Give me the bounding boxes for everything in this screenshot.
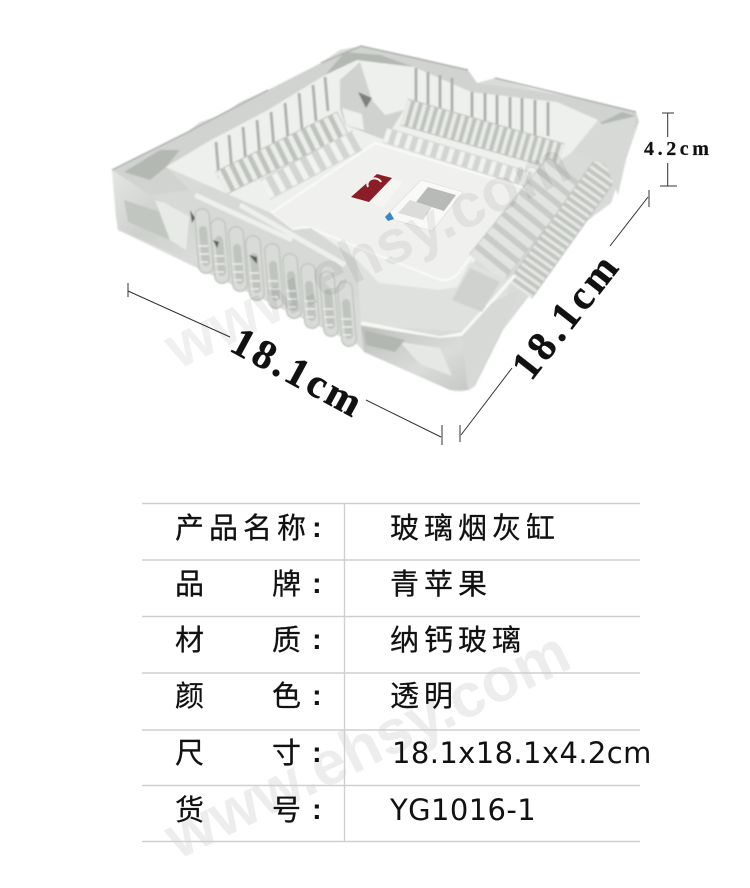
outline shading [112,46,636,170]
row: item number [175,793,536,827]
label: red brand sticker [351,174,403,207]
row: product name: 玻璃烟灰缸 [390,512,560,545]
basin floor and inner walls [166,60,598,290]
row: size: 18.1x18.1x4.2cm [392,736,652,770]
table rules [142,503,640,842]
dimension lines [460,190,649,442]
label: barcode sticker [385,180,463,231]
row: material: 质 [272,624,306,657]
back right ribbed ledge [404,112,561,157]
dimension lines [128,283,442,445]
row: material: : [312,624,322,656]
row: size: 尺 [175,738,209,770]
far right ribs [520,160,612,290]
row: color: 颜 [175,680,209,713]
row: product name: 产品名称 [175,512,311,545]
center floor [271,143,525,280]
basin back corner [340,62,404,140]
row: product name [175,512,560,545]
left corner block [112,170,205,263]
dimension value: 18.1cm [224,317,373,427]
row: size: 寸 [272,737,306,770]
dimension value: 4.2cm [644,138,713,160]
right corner ledge [571,116,636,195]
watermark lower: www.ehsy.com [153,617,581,873]
row: brand: 青苹果 [390,568,492,601]
front left sawtooth ribs [198,216,352,339]
row: color: 透明 [390,681,458,713]
watermark upper: www.ehsy.com [153,127,581,383]
row: size [175,736,652,770]
row: material: 材 [175,624,209,657]
row: item number: : [312,794,322,826]
row: item number: 货 [175,794,209,827]
dimension: height [644,113,713,186]
row: brand: 牌 [272,568,306,601]
glass rim top [112,46,639,195]
dimension lines [660,113,677,186]
row: brand [175,568,492,601]
row: brand: 品 [175,569,209,601]
rim corner highlights [124,52,636,180]
row: item number: 号 [272,795,306,827]
ashtray product photo [112,46,639,391]
row: material [175,624,526,657]
row: brand: : [312,568,322,600]
front face of corner block [361,326,470,390]
glare spots on ribs [190,210,257,264]
back left ribbed ledge [221,123,343,183]
inner stepped ribs right [385,135,530,180]
dimension: side depth [460,190,649,442]
row: product name: : [312,512,322,544]
back left wall ribs [216,77,328,178]
row: item number: YG1016-1 [389,793,536,827]
row: color [175,680,458,713]
specification table [142,503,652,842]
row: color: : [312,680,322,712]
right face of corner block [462,290,520,390]
row: color: 色 [272,680,306,713]
row: size: : [312,737,322,769]
front left rim band [150,185,361,300]
ashtray silhouette [112,46,639,391]
front right ribbed band [486,170,565,268]
row: material: 纳钙玻璃 [390,624,526,657]
front corner tray [357,260,510,332]
dimension: front width [128,283,442,445]
inner stepped ribs left [265,140,358,190]
dimension value: 18.1cm [502,243,629,388]
back right wall ribs [416,68,548,136]
